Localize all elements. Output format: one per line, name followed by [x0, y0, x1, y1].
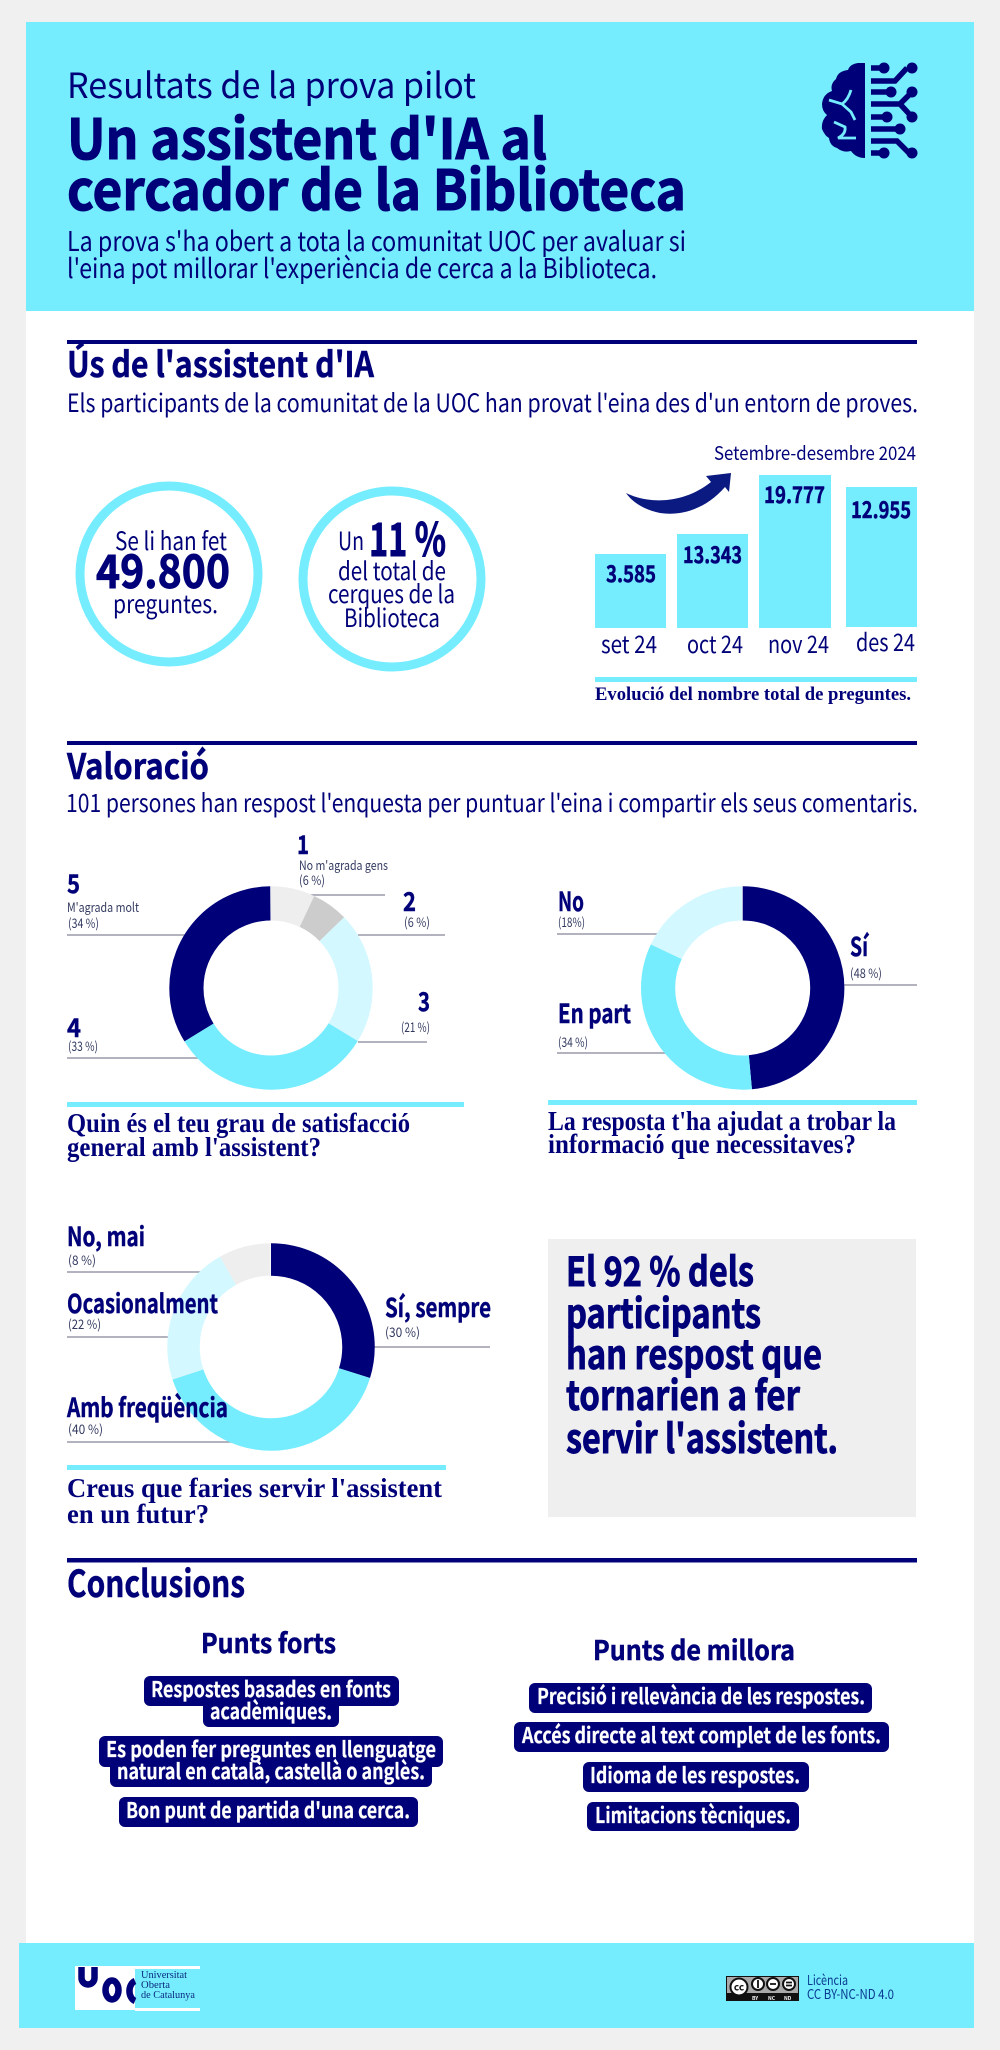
chart period label: Setembre-desembre 2024	[714, 439, 916, 466]
donut chart: helpfulness	[658, 903, 827, 1073]
stat circle: percent of searches: 11 %	[369, 504, 446, 570]
question text	[67, 1108, 410, 1162]
section: usage heading: Ús de l'assistent d'IA	[67, 337, 374, 388]
icon: growth arrow	[626, 473, 731, 514]
header description: La prova s'ha obert a tota la comunitat UOC per avaluar si	[67, 220, 686, 259]
label En part: En part	[558, 994, 631, 1031]
label 2	[403, 882, 430, 931]
licence text: CC BY-NC-ND 4.0	[807, 1983, 894, 2003]
CC licence badge: NC	[768, 1995, 776, 2002]
label 4	[67, 1008, 98, 1055]
label Amb freqüència: Amb freqüència	[66, 1388, 228, 1425]
label 3: (21 %)	[401, 1017, 430, 1036]
bar: des 24: des 24	[856, 623, 915, 658]
UOC logo: Universitat	[141, 1970, 187, 1981]
main title: cercador de la Biblioteca	[67, 146, 686, 226]
label Sí, sempre	[385, 1288, 491, 1341]
panel: satisfaction donut	[67, 825, 464, 1162]
CC licence badge: ND	[784, 1995, 792, 2002]
panel: strengths	[99, 1622, 443, 1827]
section: rating heading	[66, 739, 918, 820]
donut chart: future use	[184, 1260, 358, 1434]
licence text: Licència	[807, 1969, 848, 1989]
label Ocasionalment: (22 %)	[68, 1314, 101, 1333]
label 3: 3	[418, 982, 430, 1019]
question text: La resposta t'ha ajudat a trobar la	[548, 1106, 896, 1136]
stat circle: percent of searches: cerques de la	[328, 575, 455, 611]
pill: language: Idioma de les respostes.	[590, 1759, 800, 1790]
bar: des 24	[846, 487, 917, 658]
header description	[67, 220, 686, 286]
label Sí, sempre: Sí, sempre	[385, 1288, 491, 1325]
pill: natural language: Es poden fer preguntes en llenguatge	[106, 1733, 436, 1764]
pill: technical limits: Limitacions tècniques.	[595, 1799, 791, 1830]
label Sí, sempre: (30 %)	[385, 1322, 420, 1341]
label 5: (34 %)	[68, 913, 99, 932]
question text	[67, 1473, 442, 1529]
callout: 92 percent: participants	[566, 1282, 761, 1340]
pill: natural language: natural en català, castellà o anglès.	[117, 1755, 425, 1786]
CC licence badge: BY	[752, 1995, 758, 2002]
bar: oct 24: 13.343	[683, 536, 742, 570]
callout: 92 percent: servir l'assistent.	[566, 1407, 838, 1465]
label No, mai: No, mai	[67, 1217, 145, 1254]
bar: oct 24: oct 24	[687, 625, 743, 660]
bar: des 24: 12.955	[851, 491, 911, 525]
panel: helpfulness donut	[548, 882, 917, 1159]
footer band	[19, 1943, 974, 2028]
label Sí: Sí	[850, 927, 870, 964]
pill: starting point: Bon punt de partida d'una cerca.	[126, 1794, 410, 1825]
label Sí: (48 %)	[850, 963, 882, 982]
stat circle: percent of searches: del total de	[338, 552, 446, 588]
callout: 92 percent: tornarien a fer	[566, 1364, 800, 1422]
licence text	[807, 1969, 894, 2003]
label No: (18%)	[558, 912, 585, 931]
label 5: M'agrada molt	[67, 897, 139, 916]
header kicker: Resultats de la prova pilot	[67, 58, 476, 109]
stat circle: questions: preguntes.	[113, 585, 218, 621]
pill: full text access: Accés directe al text complet de les fonts.	[521, 1719, 881, 1750]
label No: No	[558, 882, 584, 919]
UOC logo: de Catalunya	[141, 1990, 195, 2001]
pill: precision: Precisió i rellevància de les respostes.	[537, 1680, 865, 1711]
question text: en un futur?	[67, 1499, 209, 1529]
CC licence badge: cc	[734, 1978, 744, 1994]
header panel	[26, 22, 974, 311]
label Amb freqüència: (40 %)	[68, 1419, 103, 1438]
label 1: (6 %)	[299, 870, 325, 889]
label 2: 2	[403, 882, 416, 919]
label Ocasionalment: Ocasionalment	[67, 1284, 218, 1321]
question text: Quin és el teu grau de satisfacció	[67, 1108, 410, 1138]
label 1: No m'agrada gens	[299, 855, 388, 874]
stat circle: percent of searches: Un	[338, 522, 364, 558]
label En part: (34 %)	[558, 1032, 588, 1051]
stat circle: questions: 49.800	[96, 536, 230, 602]
label En part	[558, 994, 631, 1051]
bar: nov 24: nov 24	[768, 625, 829, 660]
label 3	[401, 982, 430, 1036]
pill: academic sources	[144, 1673, 399, 1727]
callout: 92 percent: El 92 % dels	[566, 1240, 754, 1298]
label 2: (6 %)	[404, 912, 430, 931]
question text: general amb l'assistent?	[67, 1132, 321, 1162]
callout: 92 percent	[548, 1239, 916, 1517]
bar: nov 24: 19.777	[764, 476, 825, 510]
panel: improvements	[514, 1629, 889, 1831]
bar: set 24	[595, 554, 666, 660]
label No	[558, 882, 585, 931]
label Amb freqüència	[66, 1388, 228, 1438]
section: conclusions heading: Conclusions	[67, 1554, 245, 1608]
header description: l'eina pot millorar l'experiència de cerca a la Biblioteca.	[67, 247, 657, 286]
icon: AI brain with circuits	[822, 62, 918, 158]
strengths heading: Punts forts	[201, 1622, 336, 1661]
label No, mai	[67, 1217, 145, 1269]
label 1	[297, 825, 388, 889]
pill: academic sources: acadèmiques.	[210, 1695, 332, 1726]
label No, mai: (8 %)	[68, 1250, 96, 1269]
label 4: (33 %)	[68, 1036, 98, 1055]
bar: nov 24	[759, 475, 831, 660]
callout: 92 percent: han respost que	[566, 1323, 822, 1381]
stat circle: percent of searches	[303, 491, 481, 667]
UOC logo	[75, 1966, 200, 2011]
section: conclusions heading	[67, 1554, 917, 1608]
pill: academic sources: Respostes basades en fonts	[151, 1673, 391, 1704]
label 1: 1	[297, 825, 309, 862]
label Ocasionalment	[67, 1284, 218, 1333]
improvements heading: Punts de millora	[593, 1629, 795, 1668]
bar: oct 24	[677, 534, 748, 660]
bar: set 24: 3.585	[606, 555, 656, 589]
chart caption: Evolució del nombre total de preguntes.	[595, 684, 911, 705]
stat circle: questions: Se li han fet	[115, 522, 227, 558]
UOC logo: Oberta	[141, 1980, 170, 1991]
question text: informació que necessitaves?	[548, 1129, 856, 1159]
CC licence badge	[726, 1976, 799, 2002]
label 4: 4	[67, 1008, 81, 1045]
stat circle: percent of searches: Biblioteca	[344, 599, 440, 635]
donut chart: satisfaction	[186, 903, 356, 1073]
main title: Un assistent d'IA al	[67, 95, 547, 175]
panel: future use donut	[66, 1217, 491, 1529]
question text: Creus que faries servir l'assistent	[67, 1473, 442, 1503]
label Sí	[850, 927, 882, 982]
main title	[67, 95, 686, 226]
bar: set 24: set 24	[601, 625, 657, 660]
section: usage heading	[67, 337, 918, 420]
question text	[548, 1106, 896, 1159]
stat circle: questions	[80, 486, 258, 662]
label 5: 5	[67, 864, 80, 901]
bar chart: questions per month	[595, 439, 917, 705]
pill: natural language	[99, 1733, 443, 1787]
section: rating heading: Valoració	[66, 739, 209, 790]
label 5	[67, 864, 139, 932]
